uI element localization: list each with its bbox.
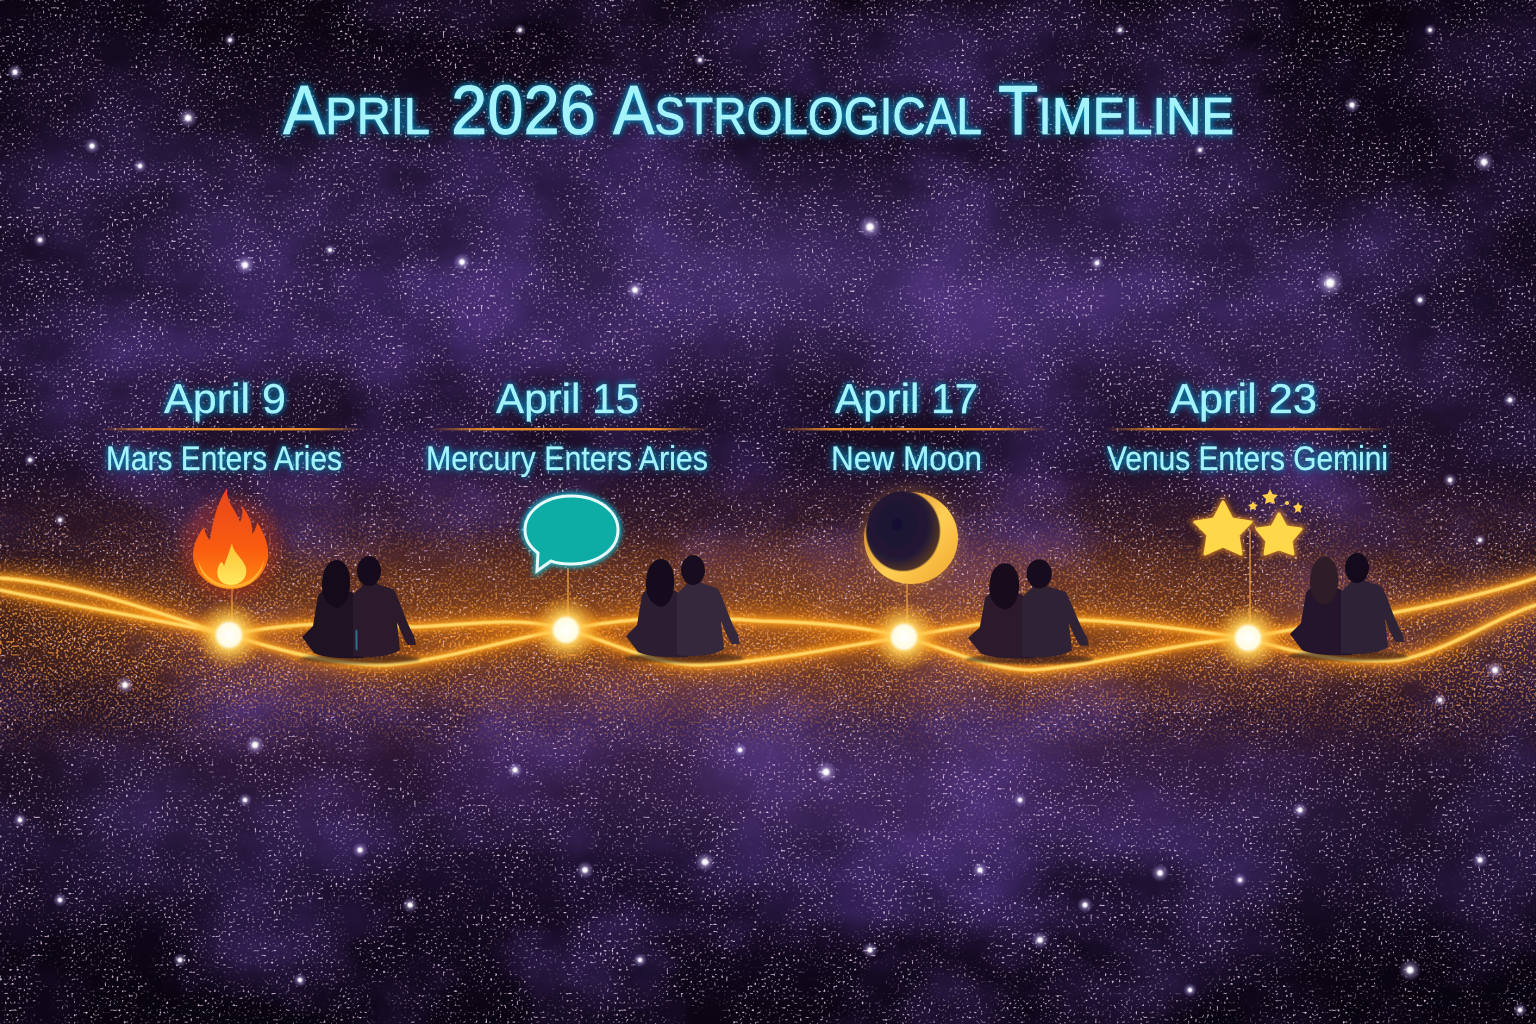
node marker — [530, 594, 602, 666]
date label: April 23 — [1170, 375, 1317, 422]
date label: April 15 — [496, 375, 639, 422]
event name: Mercury Enters Aries — [426, 440, 708, 478]
icon: crescent moon — [860, 488, 960, 588]
event 1: April 9, Mars Enters Aries — [100, 375, 362, 671]
icon: stars — [1195, 489, 1303, 554]
node marker — [868, 601, 940, 673]
title: 2026 — [451, 71, 596, 149]
node marker — [193, 599, 265, 671]
event name: Venus Enters Gemini — [1107, 440, 1388, 478]
title: APRIL — [283, 71, 430, 149]
couple 4 — [1288, 553, 1408, 661]
timeline ribbons — [0, 578, 1536, 670]
date label: April 17 — [835, 375, 978, 422]
title: TIMELINE — [998, 71, 1234, 149]
couple 3 — [966, 559, 1093, 664]
date label: April 9 — [164, 375, 286, 422]
title: ASTROLOGICAL — [613, 71, 982, 149]
event name: Mars Enters Aries — [106, 440, 342, 478]
icon: speech bubble — [525, 496, 618, 571]
couple 2 — [624, 555, 744, 663]
node marker — [1212, 602, 1284, 674]
couple 1 — [300, 556, 420, 664]
event name: New Moon — [831, 440, 982, 478]
title — [283, 71, 1234, 149]
event 3: April 17, New Moon — [778, 375, 1050, 673]
event 2: April 15, Mercury Enters Aries — [426, 375, 710, 666]
icon: flame — [181, 488, 281, 598]
event 4: April 23, Venus Enters Gemini — [1105, 375, 1388, 674]
